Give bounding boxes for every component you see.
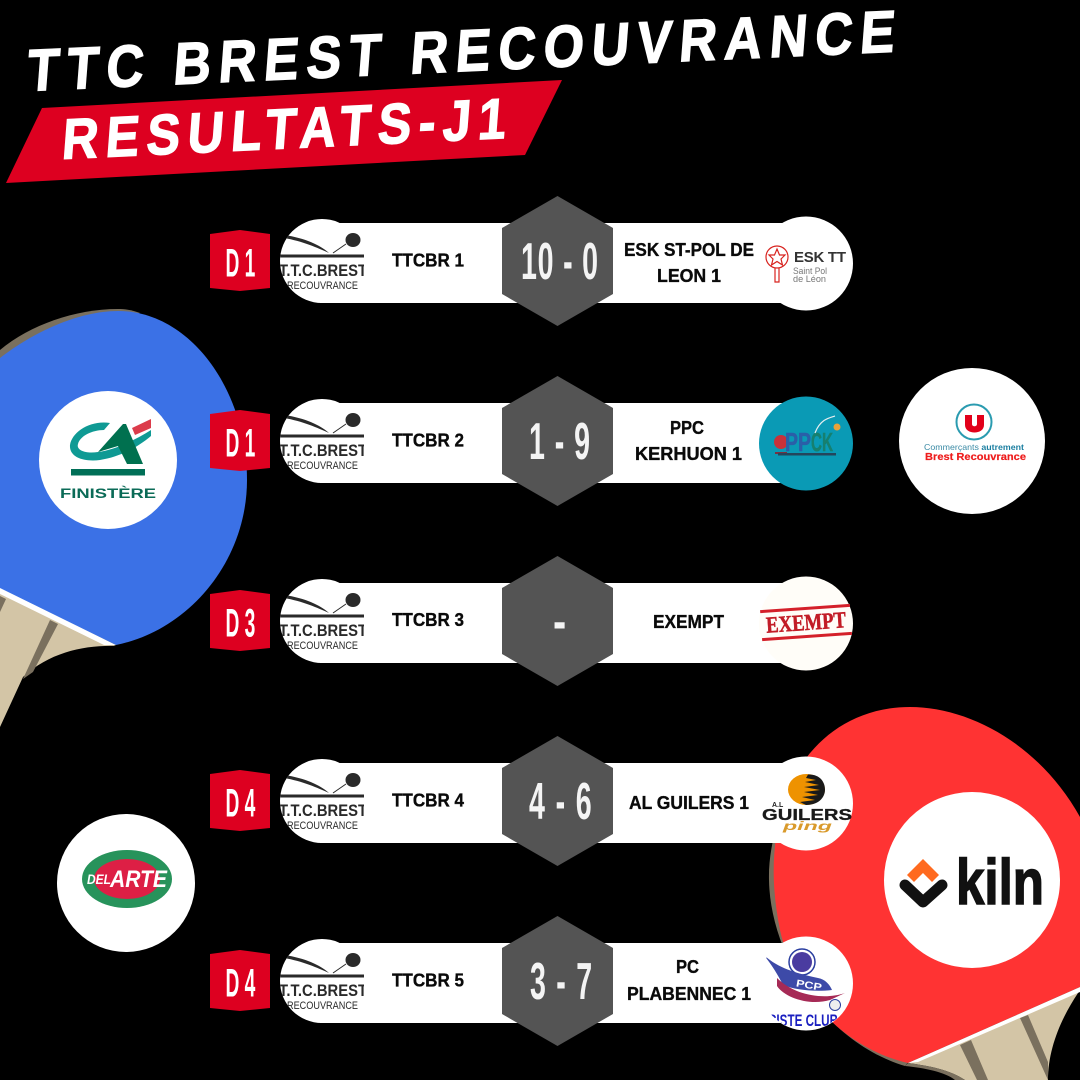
logo: al guilers [762,774,852,833]
logo: esk tt [766,246,846,285]
logo: pc plabennec: PCP [795,978,823,994]
team pill [280,756,853,850]
match row 4 [210,736,853,866]
team pill [280,576,853,670]
home team: TTCBR 5 [392,970,464,990]
division badge: D4 [226,781,256,825]
score hexagon [502,916,613,1046]
logo: ttc brest [279,413,368,472]
logo: exempt stamp: EXEMPT [765,607,847,638]
away team: PC [676,957,699,977]
sponsor: credit agricole finistere: FINISTÈRE [60,486,156,501]
sponsor: kiln: kiln [956,846,1044,918]
red paddle [769,707,1080,1080]
division badge: D4 [226,961,256,1005]
team pill [280,399,806,483]
away team: AL GUILERS 1 [629,793,749,813]
away team: EXEMPT [653,612,724,632]
match row 1 [210,196,853,326]
away team: LEON 1 [657,266,721,286]
logo: ttc brest [279,773,368,832]
division badge [210,230,270,291]
score hexagon: 1 - 9 [529,412,590,470]
logo: pc plabennec: CISTE CLUB [768,1011,838,1030]
logo: pc plabennec [763,949,845,1030]
logo: esk tt: ESK TT [794,249,846,266]
score hexagon [502,196,613,326]
sponsor: del arte [57,814,195,952]
home team: TTCBR 4 [392,790,464,810]
division badge [210,410,270,471]
title: TTC BREST RECOUVRANCE [25,0,898,104]
logo: al guilers: GUILERS [762,807,852,824]
logo: ttc brest: T.T.C.BREST [279,441,368,460]
logo: ttc brest: T.T.C.BREST [279,801,368,820]
match row 5 [210,916,853,1046]
logo: esk tt: Saint Pol [793,266,827,277]
sponsor: del arte: ARTE [109,866,168,893]
logo: ppc kerhuon: CK [811,427,833,457]
logo: ttc brest: T.T.C.BREST [279,621,368,640]
division badge [210,950,270,1011]
banner: resultats: RESULTATS-J1 [60,87,509,172]
sponsor: commercants autrement [899,368,1045,514]
division badge: D1 [226,241,255,285]
match row 3 [210,556,853,686]
logo: ttc brest: RECOUVRANCE [287,1000,358,1012]
score hexagon [502,556,613,686]
logo: ppc kerhuon: PP [785,427,811,457]
away team: ESK ST-POL DE [624,240,754,260]
sponsor: kiln [884,792,1060,968]
away team: PPC [670,418,704,438]
blue paddle [0,309,247,727]
home team: TTCBR 2 [392,430,464,450]
logo: ttc brest: RECOUVRANCE [287,280,358,292]
sponsor: del arte: DEL [87,871,111,887]
team pill [280,216,853,310]
score hexagon [502,376,613,506]
banner: resultats [6,80,562,183]
score hexagon [502,736,613,866]
division badge [210,770,270,831]
logo: ttc brest: T.T.C.BREST [279,981,368,1000]
away team: PLABENNEC 1 [627,984,751,1004]
logo: ttc brest: RECOUVRANCE [287,460,358,472]
logo: ppc kerhuon [759,396,853,490]
home team: TTCBR 1 [392,250,464,270]
logo: esk tt: de Léon [793,274,826,285]
match row 2 [210,376,853,506]
score hexagon: 3 - 7 [530,952,592,1010]
division badge [210,590,270,651]
logo: al guilers: ping [781,819,833,833]
logo: ttc brest: T.T.C.BREST [279,261,368,280]
logo: ttc brest [279,233,368,292]
division badge: D1 [226,421,255,465]
score hexagon: - [553,592,566,650]
sponsor: credit agricole finistere [39,391,177,529]
score hexagon: 4 - 6 [529,772,592,830]
team pill [280,936,853,1030]
logo: ttc brest [279,593,368,652]
sponsor: commercants autrement: Commerçants autrement [924,442,1024,452]
score hexagon: 10 - 0 [521,232,598,290]
logo: al guilers: A.L [772,802,784,809]
division badge: D3 [226,601,255,645]
away team: KERHUON 1 [635,444,742,464]
logo: ttc brest: RECOUVRANCE [287,640,358,652]
home team: TTCBR 3 [392,610,464,630]
logo: ttc brest: RECOUVRANCE [287,820,358,832]
sponsor: commercants autrement: Brest Recouvrance [925,451,1026,463]
logo: ttc brest [279,953,368,1012]
